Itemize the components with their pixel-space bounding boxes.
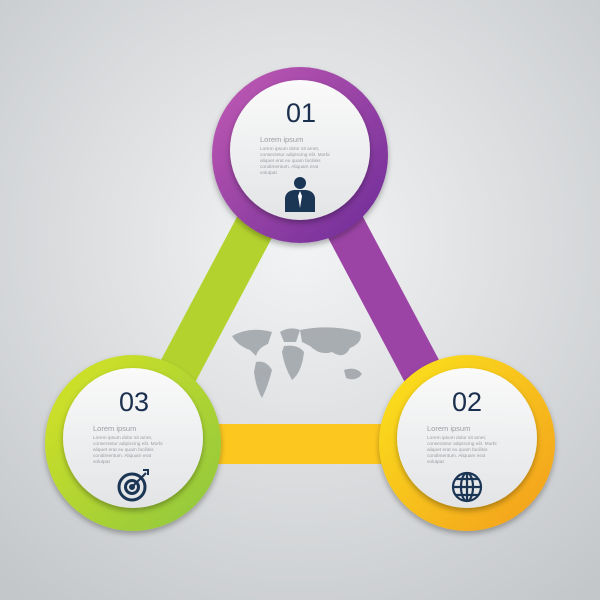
text block 03: volutpat: [93, 459, 110, 465]
text block 03: condimentum. Aliquam erat: [93, 453, 152, 459]
world map: [232, 327, 362, 398]
number 02: 02: [452, 387, 482, 417]
bar: left green: [153, 215, 275, 392]
text block 02: volutpat: [427, 459, 444, 465]
text block 01: consectetur adipiscing elit. Morbi: [260, 152, 330, 158]
icon: globe: [453, 473, 481, 501]
text block 03: aliquet erat eu quam facilisis: [93, 447, 154, 453]
text block 03: [93, 424, 163, 465]
text block 01: [260, 135, 330, 176]
text block 03: Lorem ipsum dolor sit amet,: [93, 435, 152, 441]
bar: bottom yellow: [200, 424, 400, 464]
icon: target: [119, 470, 148, 500]
panel: circle 01: [212, 67, 388, 243]
text block 01: condimentum. Aliquam erat: [260, 164, 319, 170]
text block 01: Lorem ipsum dolor sit amet,: [260, 146, 319, 152]
text block 02: aliquet erat eu quam facilisis: [427, 447, 488, 453]
panel: circle 03: [45, 355, 221, 531]
number 03: 03: [119, 387, 149, 417]
number 01: 01: [286, 98, 316, 128]
panel: circle 02: [379, 355, 555, 531]
text block 03: consectetur adipiscing elit. Morbi: [93, 441, 163, 447]
text block 02: Lorem ipsum dolor sit amet,: [427, 435, 486, 441]
text block 01: volutpat: [260, 170, 277, 176]
text block 02: Lorem ipsum: [427, 424, 470, 433]
icon: person: [285, 177, 315, 212]
text block 02: condimentum. Aliquam erat: [427, 453, 486, 459]
text block 03: Lorem ipsum: [93, 424, 136, 433]
text block 02: consectetur adipiscing elit. Morbi: [427, 441, 497, 447]
text block 01: Lorem ipsum: [260, 135, 303, 144]
bar: right purple: [325, 215, 447, 392]
text block 02: [427, 424, 497, 465]
text block 01: aliquet erat eu quam facilisis: [260, 158, 321, 164]
